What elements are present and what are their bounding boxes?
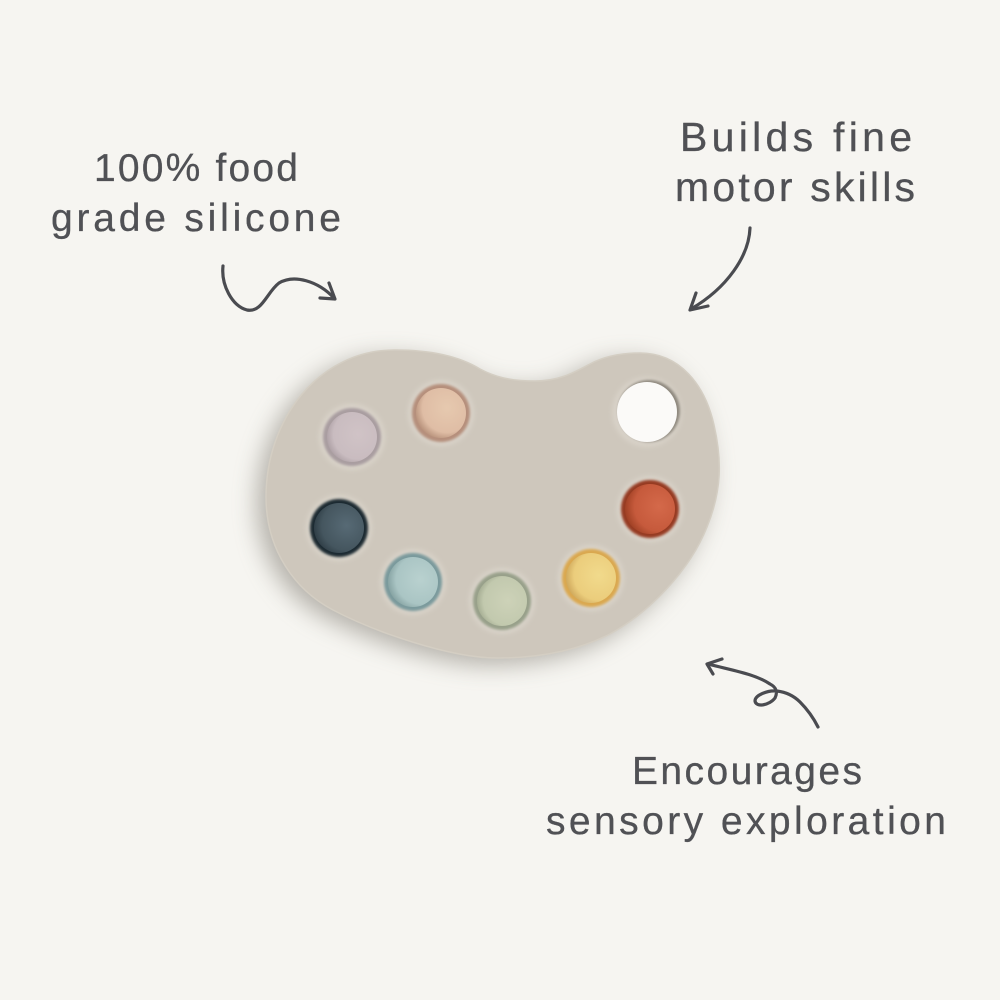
text: Encourages sensory exploration xyxy=(546,750,946,843)
text: 100% food grade silicone: 100% food xyxy=(94,147,298,190)
palette toy xyxy=(266,350,719,658)
arrow: sensory label to palette xyxy=(707,659,818,727)
text: Encourages sensory exploration: Encourages xyxy=(632,750,862,793)
button: sage xyxy=(469,568,535,634)
text: Encourages sensory exploration: sensory exploration xyxy=(546,800,946,843)
thumb hole xyxy=(612,377,682,447)
arrow: silicone label to palette xyxy=(223,266,335,310)
text: Builds fine motor skills: motor skills xyxy=(675,164,915,210)
button: yellow xyxy=(558,545,624,611)
button: rust xyxy=(617,476,683,542)
text: Builds fine motor skills xyxy=(675,114,915,210)
palette body xyxy=(266,350,719,658)
button: lilac xyxy=(319,404,385,470)
text: 100% food grade silicone: grade silicone xyxy=(51,197,341,240)
button: navy xyxy=(306,495,372,561)
text: Builds fine motor skills: Builds fine xyxy=(680,114,912,160)
arrow: fine motor label to palette xyxy=(690,228,750,310)
button: peach xyxy=(408,380,474,446)
palette shadow xyxy=(257,357,710,665)
text: 100% food grade silicone xyxy=(51,147,341,240)
button: light blue xyxy=(380,549,446,615)
